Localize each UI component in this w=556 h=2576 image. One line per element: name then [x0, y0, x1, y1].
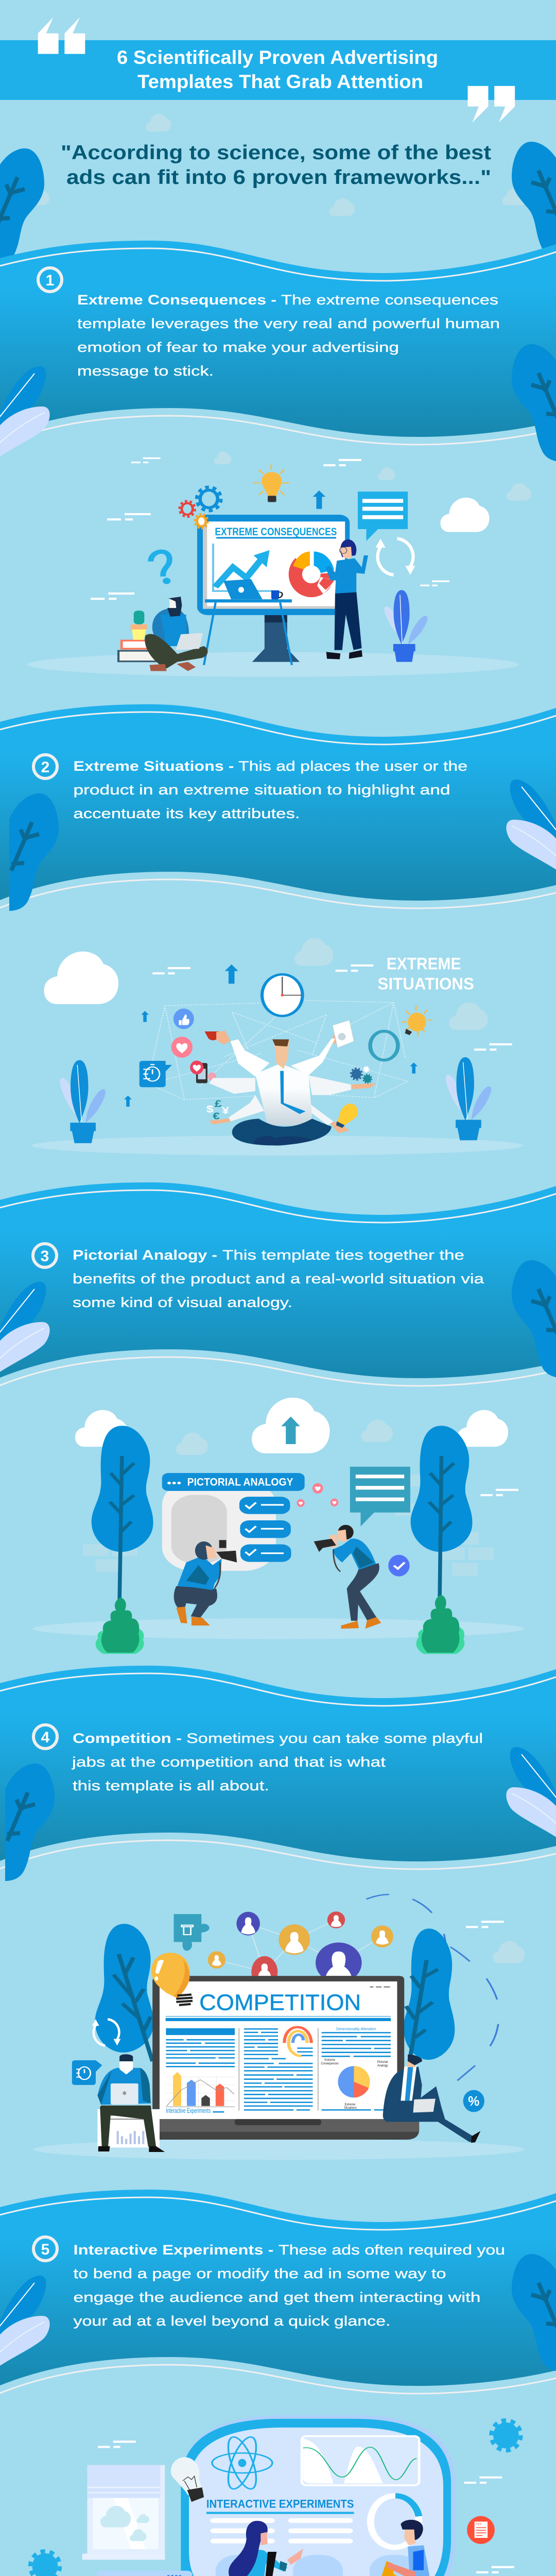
- illustration: competition scene: Extreme: [324, 2058, 335, 2062]
- panel: step 4 competition: Sometimes you can take some playful: [186, 1731, 483, 1746]
- panel: step 4 competition: [0, 1666, 556, 1881]
- illustration: competition scene: Interactive Experiments: [166, 2107, 211, 2114]
- panel: step 3 pictorial analogy: This template ties together the: [222, 1247, 464, 1263]
- illustration: extreme situations scene: [31, 938, 523, 1156]
- panel: step 4 competition: 4: [41, 1729, 50, 1746]
- panel: step 3 pictorial analogy: benefits of the product and a real-world situation via: [73, 1271, 484, 1286]
- banner: title: 6 Scientifically Proven Advertising: [117, 47, 438, 68]
- icon: quotation marks and header clouds: [24, 18, 528, 216]
- panel: step 5 interactive experiments: Interactive Experiments -: [73, 2242, 274, 2258]
- icon: header side trees: [0, 142, 556, 266]
- illustration: competition scene: Dimensionality Alteration: [336, 2027, 376, 2031]
- banner: title: Templates That Grab Attention: [137, 71, 423, 92]
- illustration: pictorial analogy scene: PICTORIAL ANALOGY: [187, 1477, 293, 1488]
- panel: step 1 extreme consequences: [0, 241, 556, 462]
- panel: step 5 interactive experiments: to bend a page or modify the ad in some way to: [73, 2266, 446, 2281]
- illustration: competition scene: Extreme: [345, 2103, 356, 2106]
- illustration: extreme consequences scene: EXTREME CONSEQUENCES: [215, 526, 337, 538]
- quote text: ads can fit into 6 proven frameworks...": [66, 166, 491, 189]
- illustration: competition scene: COMPETITION: [199, 1990, 361, 2015]
- panel: step 2 extreme situations: product in an extreme situation to highlight and: [73, 782, 450, 798]
- illustration: competition scene: %: [468, 2094, 479, 2109]
- panel: step 1 extreme consequences: The extreme consequences: [281, 292, 498, 308]
- panel: step 1 extreme consequences: emotion of fear to make your advertising: [77, 340, 399, 355]
- panel: step 3 pictorial analogy: 3: [41, 1248, 49, 1265]
- illustration: extreme situations scene: $: [206, 1104, 214, 1114]
- panel: step 1 extreme consequences: Extreme Consequences -: [77, 292, 276, 308]
- panel: step 3 pictorial analogy: some kind of visual analogy.: [73, 1295, 292, 1310]
- panel: step 2 extreme situations: Extreme Situations -: [73, 758, 234, 774]
- panel: step 1 extreme consequences: message to stick.: [77, 363, 214, 379]
- quote text: [61, 142, 491, 189]
- panel: step 2 extreme situations: accentuate its key attributes.: [73, 806, 300, 821]
- panel: step 5 interactive experiments: engage the audience and get them interacting with: [73, 2290, 481, 2305]
- illustration: competition scene: [33, 1894, 525, 2160]
- illustration: extreme situations scene: €: [213, 1111, 220, 1122]
- panel: step 4 competition: Competition -: [73, 1731, 182, 1746]
- illustration: extreme situations scene: SITUATIONS: [378, 975, 474, 993]
- panel: step 5 interactive experiments: These ads often required you: [279, 2242, 505, 2258]
- illustration: interactive experiments scene: INTERACTIVE EXPERIMENTS: [206, 2497, 354, 2510]
- illustration: competition scene: Pictorial: [377, 2060, 388, 2064]
- panel: step 5 interactive experiments: your ad at a level beyond a quick glance.: [73, 2313, 390, 2329]
- panel: step 2 extreme situations: This ad places the user or the: [238, 758, 467, 774]
- illustration: extreme situations scene: £: [215, 1098, 222, 1109]
- panel: step 4 competition: jabs at the competition and that is what: [72, 1754, 386, 1770]
- panel: step 1 extreme consequences: template leverages the very real and powerful human: [77, 316, 500, 331]
- illustration: competition scene: Analogy: [377, 2063, 388, 2067]
- panel: step 3 pictorial analogy: [0, 1182, 556, 1386]
- panel: step 2 extreme situations: 2: [41, 759, 49, 776]
- illustration: pictorial analogy scene: [32, 1398, 524, 1654]
- banner: title: [0, 40, 556, 100]
- quote text: "According to science, some of the best: [61, 142, 491, 164]
- illustration: extreme situations scene: EXTREME: [387, 955, 461, 973]
- panel: step 4 competition: this template is all about.: [73, 1778, 269, 1793]
- illustration: competition scene: Situations: [344, 2106, 357, 2110]
- illustration: interactive experiments scene: [30, 2415, 522, 2576]
- panel: step 2 extreme situations: [0, 704, 556, 911]
- panel: step 1 extreme consequences: 1: [46, 272, 54, 289]
- panel: step 5 interactive experiments: [0, 2190, 556, 2394]
- illustration: extreme consequences scene: [27, 452, 531, 677]
- panel: step 5 interactive experiments: 5: [41, 2241, 49, 2258]
- illustration: extreme situations scene: ¥: [222, 1105, 230, 1116]
- illustration: interactive experiments scene: TXT: [476, 2522, 482, 2526]
- panel: step 3 pictorial analogy: Pictorial Analogy -: [73, 1247, 217, 1263]
- illustration: competition scene: Consequences: [321, 2061, 339, 2065]
